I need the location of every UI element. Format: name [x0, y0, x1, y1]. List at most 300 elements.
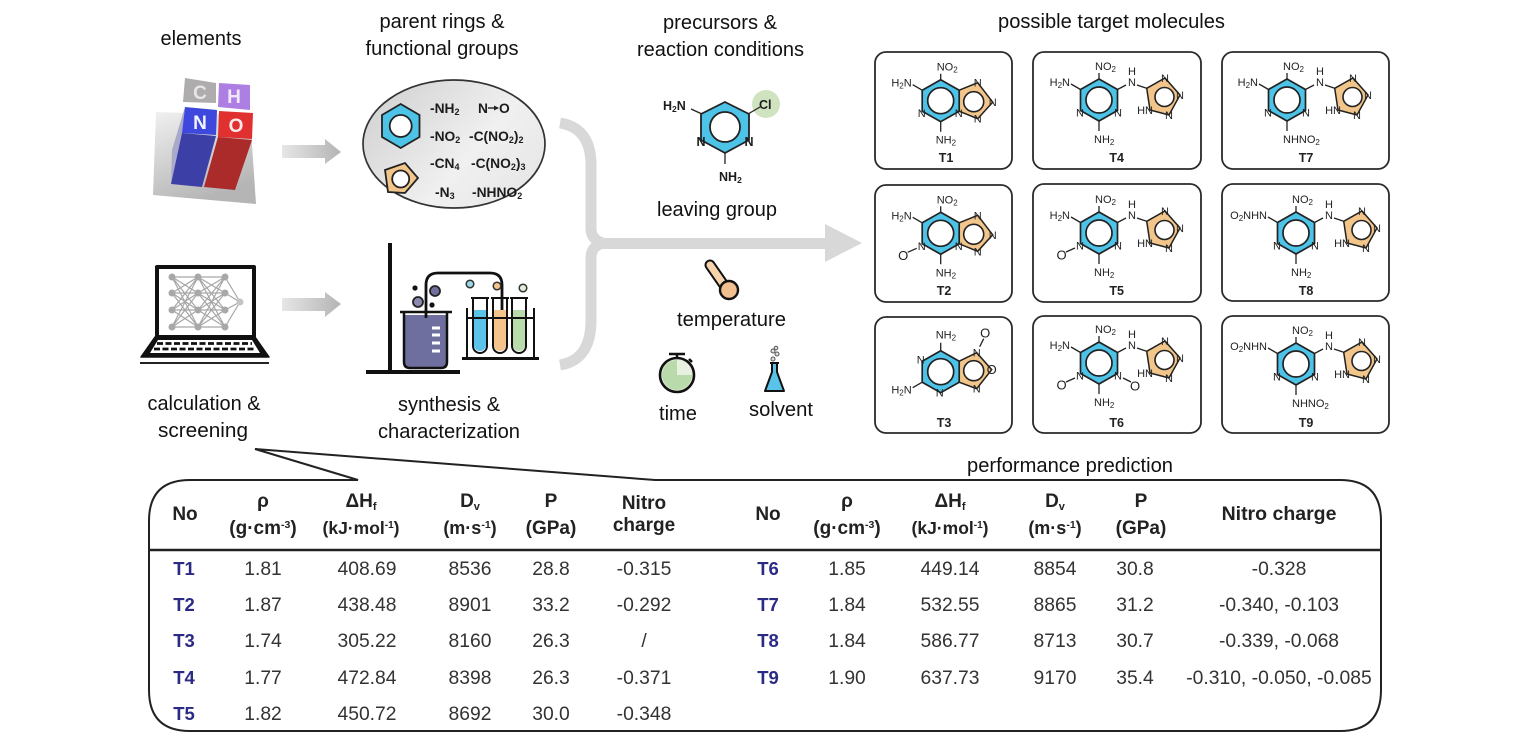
molecule card: T1: N [918, 108, 926, 120]
functional group labels: O [499, 101, 510, 116]
molecule card: T4: HN [1137, 105, 1153, 117]
molecule card: T5: H [1128, 199, 1136, 211]
molecule card: T7: 2 [1315, 138, 1320, 147]
molecule card: T1: 2 [952, 139, 957, 148]
molecule card: T8: NHN [1243, 210, 1267, 222]
molecule card: T5: 2 [1058, 214, 1063, 223]
molecule card: T3: T3 [937, 416, 951, 430]
table header: left: ) [290, 518, 297, 539]
icon: laboratory synthesis apparatus [366, 243, 539, 372]
table header: right: ) [983, 518, 988, 538]
molecule card: T4: N [1128, 77, 1136, 89]
molecule card: T5: N [1165, 243, 1173, 255]
molecule card: T6: 2 [1058, 344, 1063, 353]
functional group labels: 2 [511, 162, 516, 172]
molecule card: T2: N [904, 210, 912, 222]
molecule card: T7: N [1316, 77, 1324, 89]
molecule card: T4: 2 [1112, 65, 1116, 74]
table rows: T6 to T9: 586.77 [921, 631, 979, 652]
table header: right: (kJ·mol [912, 518, 974, 538]
table rows: T6 to T9: 637.73 [921, 668, 979, 689]
molecule card: T9: N [1311, 372, 1319, 384]
molecule card: T1: 2 [953, 66, 958, 75]
table header: right: Nitro charge [1222, 503, 1337, 525]
table rows: T1 to T5: 8160 [449, 631, 491, 652]
table rows: T1 to T5: -0.292 [617, 595, 671, 616]
molecule card: T8: HN [1334, 238, 1350, 250]
table rows: T6 to T9: T7 [757, 594, 779, 615]
molecule card: T4: 2 [1110, 138, 1115, 147]
label: time: time [659, 403, 697, 425]
molecule card: T4: N [1176, 90, 1184, 102]
label: synthesis and characterization [378, 394, 520, 443]
table header: right: (m·s [1028, 518, 1066, 538]
molecule card: T6: N [1076, 370, 1084, 382]
table header: left: ΔH [345, 491, 373, 512]
molecule card: T6: O [1056, 378, 1067, 392]
table rows: T1 to T5: 450.72 [338, 704, 396, 725]
table rows: T1 to T5: T4 [173, 667, 196, 688]
molecule card: T8 [1222, 184, 1389, 301]
table header: right: No [755, 504, 781, 525]
molecule card: T4: NO [1095, 61, 1112, 73]
heading: parent rings and functional groups [366, 11, 518, 60]
table header: left: v [474, 501, 481, 513]
molecule card: T7: N [1250, 77, 1258, 89]
icon: CHNO periodic blocks: C [193, 83, 207, 104]
molecule card: T6: N [1165, 373, 1173, 385]
molecule card: T9: HN [1334, 369, 1350, 381]
molecule: precursor with leaving group: NH [719, 170, 737, 184]
molecule card: T3: N [973, 348, 981, 360]
molecule card: T1: N [989, 97, 997, 109]
table header: left: (kJ·mol [323, 518, 385, 538]
table header: left: charge [613, 515, 675, 536]
heading: parent rings and functional groups: parent rings & [380, 11, 505, 33]
table header: left: -1 [385, 520, 394, 531]
table rows: T1 to T5: T2 [173, 594, 195, 615]
table rows: T1 to T5: 472.84 [338, 668, 397, 689]
molecule card: T2 [875, 185, 1012, 302]
molecule card: T1: 2 [899, 82, 904, 91]
molecule card: T5: T5 [1109, 284, 1124, 298]
table rows: T1 to T5: 8901 [449, 595, 491, 616]
table rows: T6 to T9: 8865 [1034, 595, 1076, 616]
molecule card: T6: NH [1094, 397, 1110, 409]
table rows: T1 to T5 [173, 558, 671, 725]
molecule card: T8: N [1325, 210, 1333, 222]
icon: solvent flask [765, 346, 784, 391]
table rows: T1 to T5: -0.315 [617, 559, 671, 580]
table rows: T6 to T9: 449.14 [921, 559, 980, 580]
molecule card: T4: T4 [1109, 151, 1124, 165]
table rows: T6 to T9: 9170 [1034, 668, 1076, 689]
functional group labels: 4 [455, 162, 460, 172]
molecule card: T7: 2 [1246, 81, 1251, 90]
table rows: T6 to T9: 1.84 [828, 631, 866, 652]
molecule card: T5: 2 [1112, 198, 1116, 207]
heading: precursors and reaction conditions: reaction conditions [637, 39, 804, 61]
table header: right: D [1045, 491, 1059, 512]
molecule card: T2: 2 [952, 271, 957, 280]
table header: left: (m·s [443, 518, 481, 538]
table rows: T6 to T9 [757, 558, 1372, 689]
table rows: T6 to T9: T8 [757, 630, 779, 651]
molecule card: T8: 2 [1308, 198, 1314, 207]
molecule card: T9: O [1230, 341, 1239, 353]
arrow: merging bracket to target molecules [560, 123, 862, 365]
molecule card: T8: N [1311, 240, 1319, 252]
molecule card: T1 [875, 52, 1012, 169]
molecule card: T6: N [1062, 340, 1070, 352]
molecule card: T4: 2 [1058, 81, 1063, 90]
molecule card: T7: N [1353, 110, 1361, 122]
molecule card: T3: N [973, 384, 981, 396]
heading: parent rings and functional groups: functional groups [366, 38, 518, 60]
table rows: T1 to T5: 408.69 [338, 559, 396, 580]
molecule card: T9: NHN [1243, 341, 1267, 353]
icon: CHNO periodic blocks: O [229, 116, 243, 137]
label: temperature: temperature [677, 309, 786, 331]
table rows: T1 to T5: 33.2 [532, 595, 570, 616]
panel: parent rings and functional groups [363, 80, 545, 208]
molecule card: T3: 2 [952, 334, 957, 343]
table rows: T1 to T5: 28.8 [532, 559, 570, 580]
molecule card: T9: N [1273, 372, 1281, 384]
molecule card: T7: NO [1283, 61, 1300, 73]
molecule card: T8: N [1362, 243, 1370, 255]
molecule card: T9: NHNO [1292, 398, 1324, 410]
table rows: T6 to T9: -0.328 [1252, 559, 1306, 580]
molecule: precursor with leaving group: H [663, 99, 672, 113]
molecule card: T3: N [917, 355, 925, 367]
functional group labels: 2 [455, 135, 460, 145]
icon: laptop with neural network [140, 267, 269, 363]
functional group labels: 2 [509, 135, 514, 145]
table rows: T1 to T5: 1.74 [244, 631, 282, 652]
table rows: T1 to T5: T1 [173, 558, 195, 579]
heading: precursors and reaction conditions [637, 12, 804, 61]
label: calculation and screening [148, 393, 261, 442]
molecule card: T4: N [1114, 108, 1122, 120]
table header: left: -1 [481, 519, 491, 531]
molecule card: T6: N [1161, 336, 1169, 348]
molecule card: T7: N [1349, 73, 1357, 85]
table rows: T1 to T5: / [641, 631, 647, 652]
table header: left: ) [491, 518, 497, 538]
molecule card: T1: N [974, 78, 982, 90]
icon: CHNO periodic blocks [153, 78, 256, 204]
molecule card: T7: HN [1325, 105, 1341, 117]
molecule card: T8: T8 [1299, 284, 1313, 298]
molecule card: T4: N [1165, 110, 1173, 122]
icon: CHNO periodic blocks: H [227, 87, 241, 108]
table header: right: v [1059, 501, 1066, 513]
molecule card: T6: H [1128, 329, 1136, 341]
label: calculation and screening: calculation & [148, 393, 261, 415]
molecule card: T8: 2 [1239, 214, 1244, 223]
functional group labels: -C(NO [469, 129, 509, 144]
table header: right [755, 491, 1337, 539]
table rows: T1 to T5: 1.81 [244, 559, 282, 580]
table rows: T6 to T9: 1.85 [828, 559, 866, 580]
molecule card: T1: T1 [939, 151, 953, 165]
table rows: T1 to T5: 8692 [449, 704, 491, 725]
molecule card: T8: O [1230, 210, 1239, 222]
molecule card: T8: 2 [1307, 271, 1312, 280]
table rows: T1 to T5: 26.3 [532, 668, 570, 689]
heading: elements: elements [160, 28, 242, 50]
table rows: T6 to T9: 35.4 [1116, 668, 1154, 689]
icon: five-membered ring [385, 163, 418, 193]
table rows: T1 to T5: 1.77 [244, 668, 282, 689]
table header: right: ρ [841, 491, 853, 512]
table header: right: P [1135, 491, 1148, 512]
molecule card: T1: N [904, 78, 912, 90]
functional group labels: 2 [518, 135, 524, 145]
table rows: T6 to T9: 532.55 [921, 595, 979, 616]
heading: performance prediction: performance prediction [967, 455, 1173, 477]
table header: right: (GPa) [1116, 518, 1166, 539]
functional group labels: 3 [450, 191, 455, 201]
table header: right: ) [1076, 518, 1082, 538]
table rows: T6 to T9: 30.7 [1116, 631, 1154, 652]
table rows: T1 to T5: 8536 [449, 559, 491, 580]
table header: right: ) [874, 518, 881, 539]
molecule card: T9: 2 [1308, 329, 1314, 338]
molecule card: T4: N [1076, 108, 1084, 120]
table rows: T1 to T5: 8398 [449, 668, 491, 689]
molecule card: T6: 2 [1110, 401, 1115, 410]
molecule card: T6: HN [1137, 368, 1153, 380]
functional group labels: -NO [430, 129, 455, 144]
molecule card: T9: H [1325, 330, 1333, 342]
molecule card: T2: 2 [899, 214, 904, 223]
table rows: T1 to T5: 1.82 [244, 704, 282, 725]
molecule card: T6: 2 [1112, 328, 1116, 337]
molecule card: T3: NH [936, 330, 952, 342]
label: calculation and screening: screening [158, 420, 248, 442]
molecule card: T5: N [1114, 240, 1122, 252]
molecule card: T9: 2 [1324, 402, 1329, 411]
molecule card: T8: NO [1292, 194, 1308, 206]
molecule card: T5: N [1176, 223, 1184, 235]
molecule card: T4: N [1062, 77, 1070, 89]
molecule card: T5: NO [1095, 194, 1112, 206]
molecule card: T9: N [1358, 337, 1366, 349]
molecule card: T6: NO [1095, 324, 1112, 336]
molecule card: T2: N [989, 230, 997, 242]
molecule card: T9: N [1362, 374, 1370, 386]
table header: left: (g·cm [229, 518, 281, 539]
table header: left: P [545, 491, 558, 512]
molecule card: T7: H [1316, 66, 1324, 78]
molecule: precursor with leaving group: Cl [759, 98, 772, 112]
table rows: T1 to T5: -0.348 [617, 704, 671, 725]
molecule card: T2: NO [937, 194, 953, 206]
molecule card: T6: H [1050, 340, 1058, 352]
molecule card: T9: N [1373, 354, 1381, 366]
icon: six-membered ring [382, 104, 420, 148]
functional group labels: -C(NO [471, 156, 511, 171]
molecule card: T7: 2 [1300, 65, 1304, 74]
molecule card: T2: 2 [953, 198, 958, 207]
molecule card: T2: N [974, 246, 982, 258]
table header: left [172, 491, 675, 539]
table header: right: -1 [974, 520, 983, 531]
molecule card: T5: N [1161, 206, 1169, 218]
table rows: T6 to T9: -0.340, -0.103 [1219, 595, 1339, 616]
molecule card: T3: O [980, 326, 990, 341]
molecule card: T1: N [955, 108, 963, 120]
molecule card: T3: 2 [899, 389, 904, 398]
molecule card: T3 [875, 317, 1012, 433]
table rows: T1 to T5: 26.3 [532, 631, 570, 652]
molecule card: T8: N [1273, 240, 1281, 252]
table rows: T1 to T5: 1.87 [244, 595, 282, 616]
table rows: T6 to T9: -0.310, -0.050, -0.085 [1186, 668, 1372, 689]
molecule: precursor with leaving group: N [677, 99, 686, 113]
functional group labels: ) [514, 129, 518, 144]
molecule: precursor with leaving group: 2 [737, 175, 742, 185]
molecule card: T8: N [1373, 223, 1381, 235]
molecule card: T9: T9 [1299, 416, 1313, 430]
heading: precursors and reaction conditions: precursors & [663, 12, 778, 34]
heading: possible target molecules: possible target molecules [998, 11, 1225, 33]
molecule card: T7: N [1364, 90, 1372, 102]
molecule card: T8: N [1358, 206, 1366, 218]
molecule card: T6: N [1114, 370, 1122, 382]
molecule: precursor with leaving group [663, 90, 780, 185]
table rows: T6 to T9: 31.2 [1116, 595, 1154, 616]
molecule card: T1: NH [936, 135, 952, 147]
table header: right: (g·cm [813, 518, 865, 539]
molecule card: T5: H [1050, 210, 1058, 222]
icon: thermometer [710, 265, 738, 299]
functional group labels: -CN [430, 156, 455, 171]
molecule card: T6: N [1176, 353, 1184, 365]
label: leaving group: leaving group [657, 199, 777, 221]
table rows: T6 to T9: 8713 [1034, 631, 1076, 652]
molecule card: T7 [1222, 52, 1389, 169]
functional group labels [430, 101, 526, 201]
table rows: T6 to T9: T9 [757, 667, 779, 688]
table rows: T1 to T5: -0.371 [617, 668, 671, 689]
molecule card: T3: N [936, 388, 944, 400]
molecule card: T3: H [891, 385, 899, 397]
table header: left: Nitro [622, 493, 666, 514]
molecule card: T7: N [1302, 108, 1310, 120]
molecule card: T2: N [918, 241, 926, 253]
molecule card: T4 [1033, 52, 1201, 169]
molecule card: T9: N [1325, 341, 1333, 353]
table rows: T1 to T5: 305.22 [338, 631, 396, 652]
molecule card: T5: N [1062, 210, 1070, 222]
molecule card: T7: T7 [1299, 151, 1313, 165]
table header: right: -1 [1066, 519, 1076, 531]
table rows: T6 to T9: T6 [757, 558, 779, 579]
molecule card: T5: N [1128, 210, 1136, 222]
functional group labels: 3 [520, 162, 526, 172]
molecule card: T1: N [974, 114, 982, 126]
functional group labels: 2 [455, 107, 460, 117]
arrow: elements to rings [282, 139, 341, 164]
molecule card: T5: HN [1137, 238, 1153, 250]
label: solvent: solvent [749, 399, 813, 421]
molecule card: T2: NH [936, 267, 952, 279]
panel: performance table callout [149, 449, 1381, 731]
table rows: T6 to T9: 1.90 [828, 668, 866, 689]
table rows: T1 to T5: 30.0 [532, 704, 570, 725]
molecule card: T6: O [1130, 378, 1140, 394]
table header: left: -3 [281, 519, 291, 531]
functional group labels: -NHNO [472, 185, 517, 200]
molecule card: T5 [1033, 184, 1201, 302]
molecule card: T3: N [904, 385, 912, 397]
molecule card: T5: N [1076, 240, 1084, 252]
molecule card: T2: N [955, 241, 963, 253]
functional group labels: -N [435, 185, 450, 200]
molecule card: T9: 2 [1239, 345, 1244, 354]
table header: right: f [962, 501, 966, 513]
table header: right: ΔH [934, 491, 962, 512]
table rows: T1 to T5: T3 [173, 630, 195, 651]
molecule card: T1: NO [937, 62, 953, 74]
table header: left: ) [394, 518, 399, 538]
table rows: T6 to T9: 1.84 [828, 595, 866, 616]
molecule: precursor with leaving group: N [744, 135, 754, 149]
molecule card: T5: O [1056, 248, 1067, 262]
molecule card: T8: NH [1291, 267, 1307, 279]
label: synthesis and characterization: synthesis & [398, 394, 501, 416]
molecule card: T7: NHNO [1283, 134, 1315, 146]
molecule card: T3: O [987, 362, 997, 377]
molecule card: T4: H [1128, 66, 1136, 78]
icon: CHNO periodic blocks: N [193, 113, 207, 134]
table header: left: No [172, 504, 198, 525]
table rows: T6 to T9: 30.8 [1116, 559, 1154, 580]
table header: left: f [373, 501, 377, 513]
molecule: precursor with leaving group: 2 [672, 104, 677, 114]
molecule card: T2: H [891, 210, 899, 222]
molecule card: T8: H [1325, 199, 1333, 211]
molecule card: T1: H [891, 78, 899, 90]
molecule card: T4: NH [1094, 134, 1110, 146]
molecule card: T9: NO [1292, 325, 1308, 337]
molecule card: T5: 2 [1110, 271, 1115, 280]
icon: stopwatch [660, 354, 694, 392]
molecule: precursor with leaving group: N [696, 135, 706, 149]
table rows: T6 to T9: -0.339, -0.068 [1219, 631, 1339, 652]
table rows: T6 to T9: 8854 [1034, 559, 1077, 580]
molecule card: T9 [1222, 316, 1389, 433]
arrow: calculation to synthesis [282, 292, 341, 317]
molecule card: T2: T2 [937, 284, 951, 298]
molecule card: T7: H [1238, 77, 1246, 89]
functional group labels: 2 [517, 191, 522, 201]
molecule card: T5: NH [1094, 267, 1110, 279]
molecule card: T2: O [898, 248, 908, 263]
table rows: T1 to T5: T5 [173, 703, 195, 724]
table rows: T1 to T5: 438.48 [338, 595, 396, 616]
functional group labels: -NH [430, 101, 455, 116]
functional group labels: ) [516, 156, 520, 171]
label: synthesis and characterization: characterization [378, 421, 520, 443]
table header: left: ρ [257, 491, 269, 512]
molecule card: T6: N [1128, 340, 1136, 352]
molecule card: T2: N [974, 210, 982, 222]
molecule card: T6: T6 [1109, 416, 1124, 430]
